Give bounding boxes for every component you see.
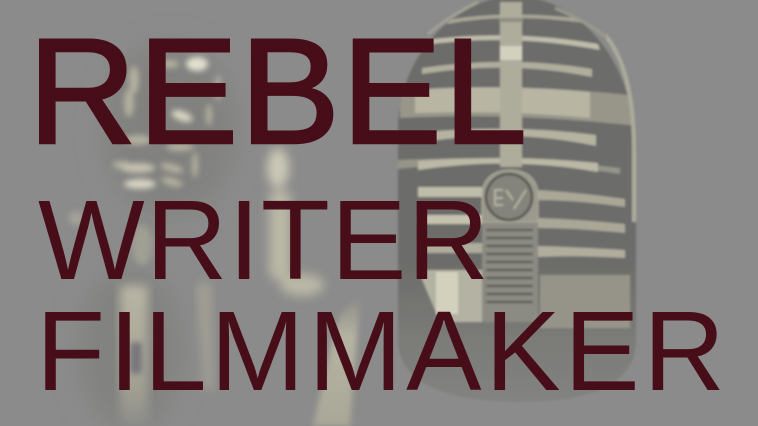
grille bands — [398, 14, 638, 258]
microphone head — [395, 0, 640, 425]
badge ridges — [486, 230, 533, 302]
right edge highlight — [605, 35, 634, 222]
central spine — [500, 2, 522, 167]
badge monogram — [495, 190, 526, 209]
stand — [120, 285, 148, 426]
badge plate — [482, 170, 538, 322]
main studio microphone — [395, 0, 640, 425]
title: REBEL: REBEL — [28, 7, 527, 175]
subtitle: FILMMAKER: FILMMAKER — [36, 288, 725, 414]
cable — [313, 300, 360, 426]
blurred background microphone — [69, 45, 360, 426]
subtitle: WRITER: WRITER — [38, 177, 489, 303]
lower body — [540, 275, 630, 328]
